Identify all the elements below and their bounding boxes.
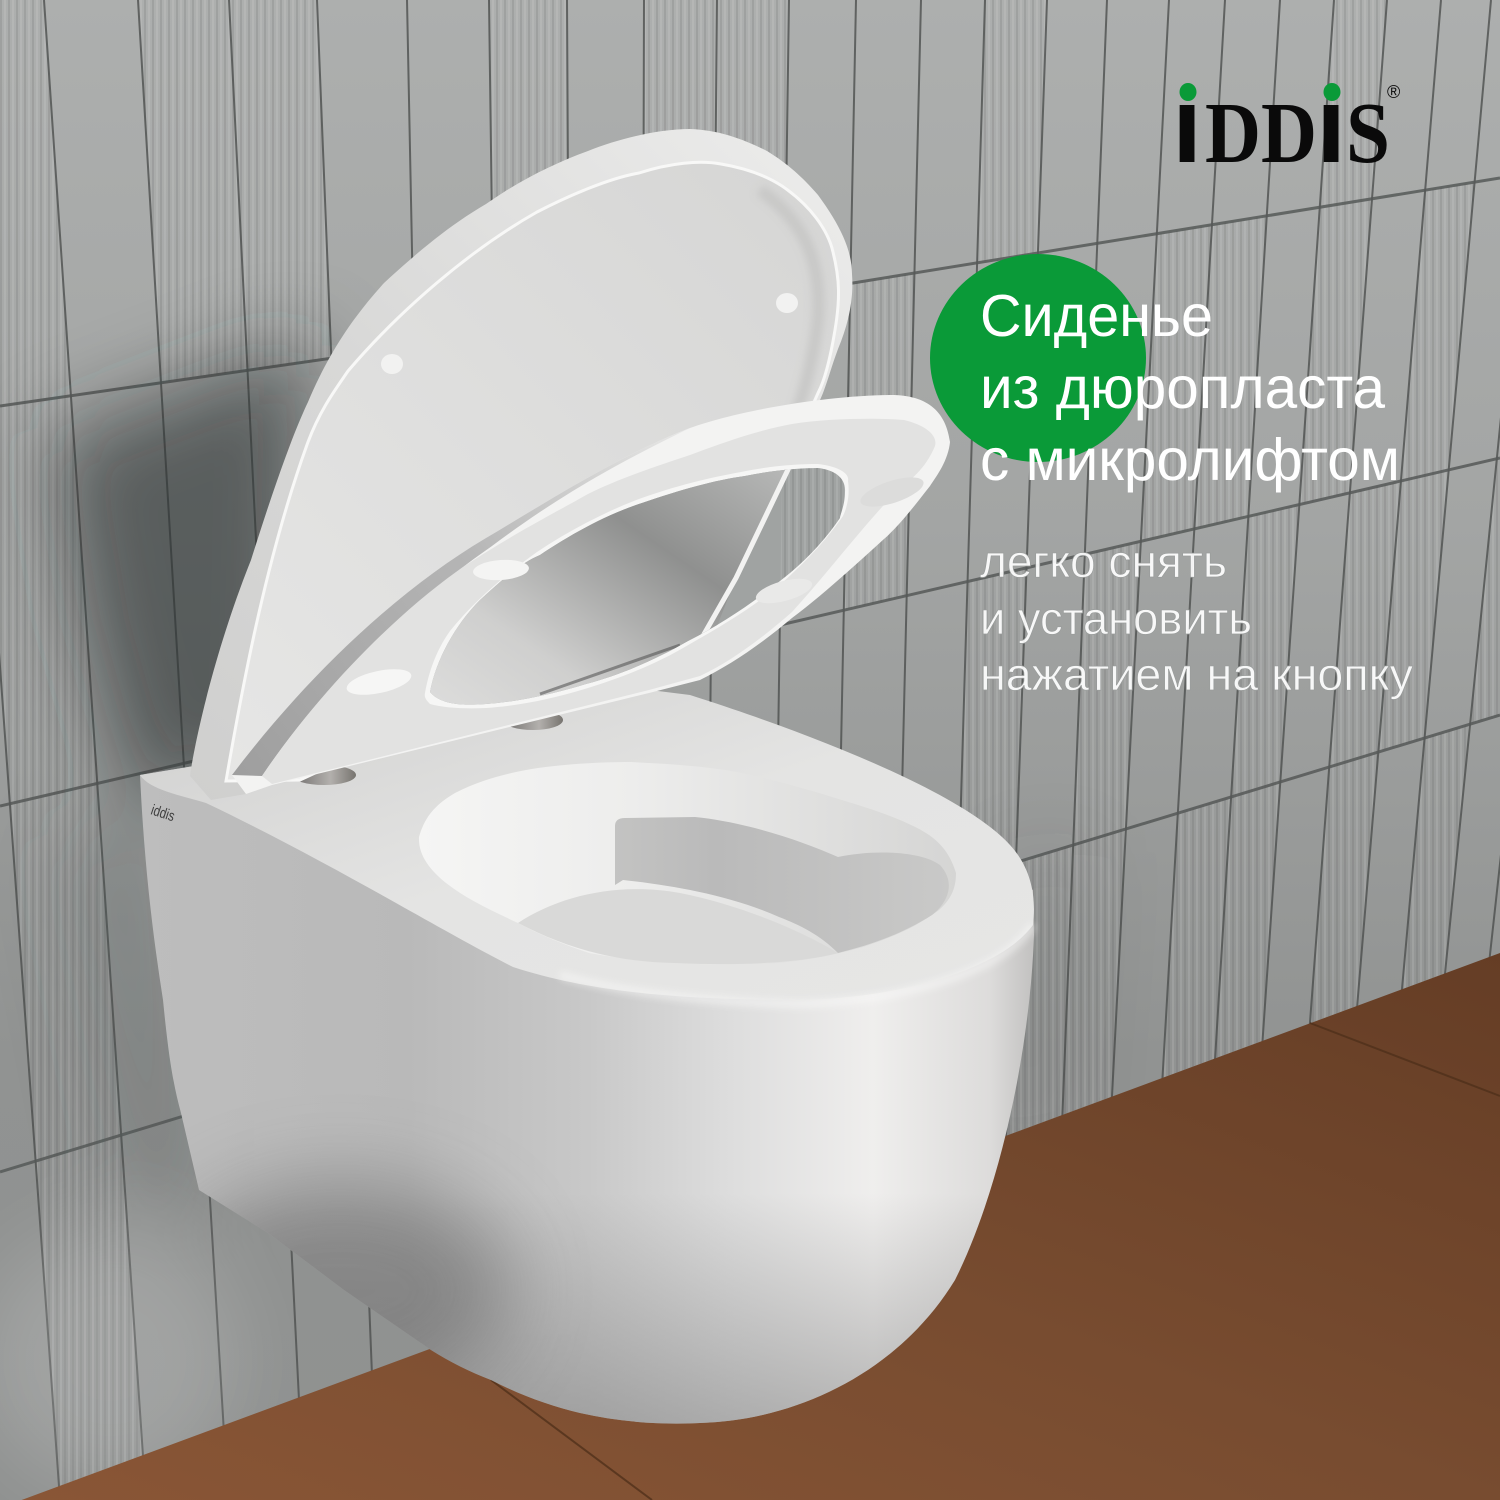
centre release button <box>424 723 468 743</box>
logo letter i: ı <box>1172 64 1202 185</box>
lid outer shell <box>190 129 852 800</box>
lid <box>190 129 852 800</box>
lid peg right <box>776 293 798 313</box>
lid seen through hole <box>430 470 785 704</box>
heading: с микролифтом <box>980 427 1400 493</box>
hinge left <box>292 765 356 785</box>
bumper 3 <box>753 574 815 608</box>
floor <box>0 953 1500 1500</box>
subheading: нажатием на кнопку <box>980 649 1414 700</box>
seat face <box>262 419 935 784</box>
seat outer <box>232 395 950 794</box>
bumper 4 <box>857 471 927 513</box>
logo letter i second: ı <box>1316 64 1346 185</box>
toilet body <box>140 690 1034 1424</box>
green circle accent <box>930 254 1146 462</box>
seat hole rim <box>425 464 849 708</box>
subheading: легко снять <box>980 536 1227 587</box>
logo letter S: S <box>1346 84 1390 181</box>
toilet top surface <box>140 690 1034 1000</box>
body lower shade <box>198 1147 976 1424</box>
bumper 1 <box>344 664 414 700</box>
bowl basin <box>518 889 838 964</box>
bowl opening <box>419 762 956 964</box>
hinge right <box>503 710 563 730</box>
logo dot 1 <box>1180 83 1196 101</box>
logo dot 2 <box>1324 83 1340 101</box>
heading: Сиденье <box>980 283 1213 349</box>
lid inner surface <box>226 162 839 781</box>
wall-hung toilet <box>140 0 1040 1500</box>
bumper 2 <box>472 558 530 582</box>
registered mark: ® <box>1387 82 1400 102</box>
seat hole view <box>430 468 846 705</box>
rim highlight <box>560 925 1033 1004</box>
logo letters DD: DD <box>1205 84 1317 181</box>
small logo on ceramic: iddis <box>149 802 177 825</box>
seat grey side strip <box>232 428 690 776</box>
lid inner right shading <box>760 190 819 450</box>
shadow of lid and bowl on wall <box>0 340 1080 1490</box>
brand logo: IDDIS <box>1172 64 1400 185</box>
seat ring <box>232 395 950 794</box>
lid peg left <box>381 354 403 374</box>
subheading: и установить <box>980 593 1252 644</box>
subheading <box>980 536 1414 700</box>
heading: из дюропласта <box>980 355 1385 421</box>
bowl rear recess <box>615 817 949 953</box>
heading <box>980 283 1400 493</box>
